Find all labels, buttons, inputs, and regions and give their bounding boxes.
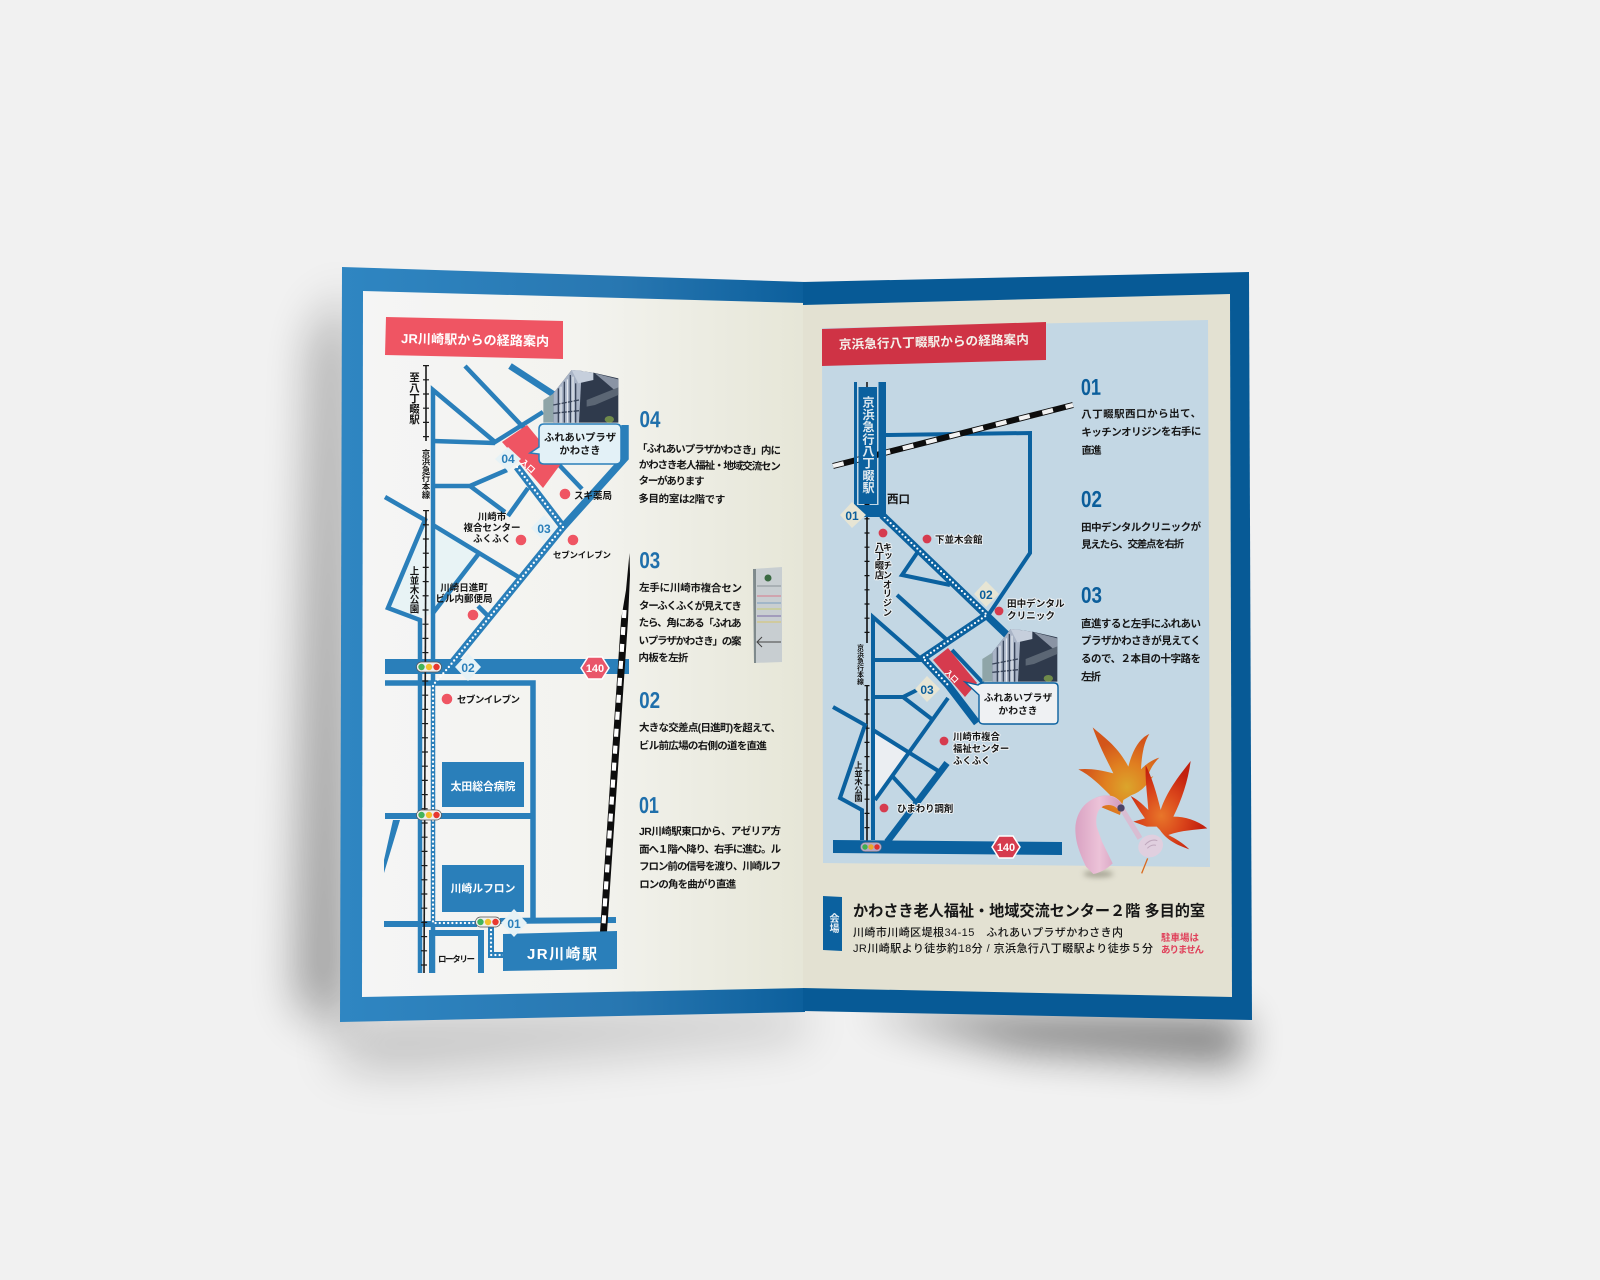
map labels: セブンイレブン	[457, 694, 520, 706]
step 01 text right: 直進	[1081, 444, 1102, 457]
venue label: 会場	[827, 912, 839, 934]
heading: JR route: JR川崎駅からの経路案内	[401, 331, 549, 349]
building: Lufron	[442, 865, 524, 912]
sign photo	[753, 567, 782, 663]
step markers: 01	[507, 917, 521, 931]
map labels: 西口	[887, 493, 910, 506]
buildings	[442, 762, 524, 807]
red venue building	[933, 648, 977, 697]
road fragment	[384, 820, 400, 873]
step 03 text: いプラザかわさき」の案	[639, 634, 742, 648]
parking note: ありません	[1161, 945, 1204, 956]
booklet shadow	[300, 290, 1245, 1070]
thick dotted roads	[882, 515, 1007, 723]
map panel	[822, 320, 1210, 867]
illustration: maple leaves and hearing aid	[1075, 727, 1207, 877]
left page paper	[362, 291, 805, 997]
step 03 text	[638, 547, 743, 665]
callout: Fureai Plaza: ふれあいプラザ	[984, 692, 1052, 704]
route dots	[433, 467, 563, 955]
map labels: 至八丁畷駅	[408, 372, 420, 425]
step 01 text right: 01	[1081, 374, 1101, 400]
station: Hatchonawate: 京浜急行八丁畷駅	[860, 395, 875, 494]
map: JR Kawasaki route	[384, 365, 630, 973]
thick diagonal roads	[448, 425, 625, 955]
map labels: キッチンオリジン	[882, 542, 892, 617]
step 01 text: JR川崎駅東口から、アゼリア方	[639, 825, 781, 838]
leaf: red	[1131, 761, 1207, 849]
map labels: 川崎市	[478, 511, 507, 523]
booklet: left page	[340, 267, 1252, 1022]
step markers: 03	[920, 683, 934, 697]
map labels: ひまわり調剤	[897, 803, 953, 814]
traffic signals	[416, 662, 500, 927]
heading: Keikyu route: 京浜急行八丁畷駅からの経路案内	[839, 332, 1029, 352]
step 02 text right: 見えたら、交差点を右折	[1081, 537, 1185, 551]
map labels: スギ薬局	[574, 490, 612, 502]
step 01 text: 01	[639, 792, 659, 818]
step 03 text right: 直進すると左手にふれあい	[1081, 617, 1201, 630]
map labels: 京浜急行本線	[856, 643, 864, 686]
building: red venue: 入口	[519, 458, 537, 475]
map labels: 上並木公園	[408, 565, 419, 614]
roads	[833, 433, 1030, 842]
step 03 text: 左手に川崎市複合セン	[639, 581, 742, 595]
hearing aid tube	[1097, 798, 1140, 838]
map labels: 下並木会館	[935, 534, 983, 546]
ear piece	[1135, 831, 1167, 861]
step 02 text right: 田中デンタルクリニックが	[1081, 520, 1202, 534]
map labels: ビル内郵便局	[435, 593, 493, 605]
building: red venue	[502, 425, 560, 488]
right page blue cover	[803, 272, 1252, 1020]
step 03 text: ターふくふくが見えてき	[639, 599, 742, 613]
leaf stem	[1142, 858, 1148, 873]
step 04 text	[636, 406, 782, 507]
station: Hatchonawate	[854, 382, 886, 517]
map labels	[854, 493, 1065, 814]
step 01 text right	[1081, 373, 1202, 457]
step markers: 02	[979, 588, 993, 602]
station: JR Kawasaki: JR川崎駅	[527, 945, 597, 963]
step 01 text: 面へ１階へ降り、右手に進む。ル	[639, 843, 782, 856]
step 04 text: 04	[639, 406, 661, 432]
step 03 text right: るので、２本目の十字路を	[1081, 652, 1201, 665]
step markers: 04	[501, 452, 515, 466]
map: Hatchonawate route	[833, 382, 1073, 858]
railway Keikyu line	[424, 365, 426, 973]
park area	[875, 733, 907, 800]
step 03 text right: 左折	[1081, 670, 1102, 683]
step 01 text right: 八丁畷駅西口から出て、	[1081, 407, 1201, 421]
parking note: 駐車場は	[1161, 932, 1200, 944]
heading: Keikyu route	[822, 322, 1046, 366]
map labels: 京浜急行本線	[421, 448, 431, 500]
step markers	[840, 502, 999, 702]
step 01 text: ロンの角を曲がり直進	[639, 878, 737, 891]
map labels: 複合センター	[463, 522, 521, 534]
map labels: 福祉センター	[953, 743, 1009, 754]
route 140 sign	[581, 657, 609, 679]
map labels: ふくふく	[473, 534, 511, 545]
signal	[860, 842, 882, 852]
road 140	[385, 659, 629, 674]
step markers	[455, 447, 557, 937]
map labels: 上並木公園	[854, 760, 863, 803]
callout: Fureai Plaza: かわさき	[998, 705, 1038, 717]
venue info: かわさき老人福祉・地域交流センター２階 多目的室	[853, 902, 1205, 920]
park area	[388, 522, 478, 620]
leaf: orange	[1078, 727, 1159, 815]
step 02 text	[639, 687, 781, 752]
roads	[384, 366, 616, 973]
step markers: 01	[845, 509, 859, 523]
photo: venue building	[543, 370, 618, 423]
map labels: セブンイレブン	[553, 550, 611, 560]
shadow	[1083, 871, 1113, 877]
map labels: 川崎日進町	[440, 582, 488, 594]
map labels: 川崎市複合	[953, 731, 1001, 742]
route 140 sign	[992, 836, 1020, 858]
step 03 text: 03	[639, 547, 660, 573]
step 04 text: ターがあります	[638, 474, 705, 488]
right page paper	[803, 294, 1232, 997]
map labels: ロータリー	[438, 954, 475, 964]
step 01 text: フロン前の信号を渡り、川崎ルフ	[639, 860, 781, 873]
rail Keikyu vertical	[866, 504, 868, 842]
step 03 text right: 03	[1081, 582, 1102, 608]
map labels	[408, 372, 612, 964]
step 04 text: かわさき老人福祉・地域交流セン	[639, 458, 781, 473]
venue info	[853, 902, 1205, 955]
map labels: クリニック	[1007, 611, 1055, 622]
tube joint	[1117, 804, 1125, 812]
photo: venue building	[982, 629, 1057, 682]
step 02 text right	[1081, 485, 1202, 551]
venue info: JR川崎駅より徒歩約18分 / 京浜急行八丁畷駅より徒歩５分	[853, 941, 1153, 955]
route 140 sign: 140	[586, 663, 604, 675]
step markers: 02	[461, 661, 475, 675]
callout: Fureai Plaza	[530, 424, 621, 464]
step 03 text right: プラザかわさきが見えてく	[1081, 634, 1201, 647]
parking note	[1161, 932, 1204, 956]
red venue building: 入口	[943, 668, 960, 685]
rail JR diagonal	[833, 405, 1073, 466]
step 04 text: 「ふれあいプラザかわさき」内に	[637, 442, 781, 457]
map labels: 八丁畷店	[874, 542, 884, 580]
callout: Fureai Plaza: かわさき	[559, 445, 601, 457]
station: JR Kawasaki	[503, 931, 617, 971]
venue info: 川崎市川崎区堤根34-15 ふれあいプラザかわさき内	[853, 925, 1123, 939]
step 02 text: ビル前広場の右側の道を直進	[639, 739, 767, 752]
callout: Fureai Plaza: ふれあいプラザ	[544, 432, 617, 444]
left page blue cover	[340, 267, 805, 1022]
step 02 text right: 02	[1081, 486, 1102, 512]
railway JR	[600, 553, 630, 932]
buildings: 太田総合病院	[451, 779, 516, 793]
step 03 text right	[1081, 582, 1201, 683]
road 140	[833, 840, 1062, 855]
heading: JR route	[385, 317, 563, 359]
map labels: ふくふく	[953, 755, 991, 766]
step 01 text right: キッチンオリジンを右手に	[1081, 425, 1201, 439]
step 03 text: たら、角にある「ふれあ	[639, 616, 742, 630]
step 03 text: 内板を左折	[638, 651, 689, 664]
building: Lufron: 川崎ルフロン	[451, 881, 516, 895]
route 140 sign: 140	[997, 842, 1015, 854]
venue label	[823, 896, 842, 951]
step 04 text: 多目的室は2階です	[638, 492, 725, 506]
map labels: 田中デンタル	[1007, 598, 1065, 610]
hearing aid body	[1075, 796, 1123, 874]
step 01 text	[639, 792, 782, 891]
callout: Fureai Plaza	[965, 682, 1058, 724]
booklet: right page	[803, 272, 1252, 1020]
step 02 text: 02	[639, 687, 660, 713]
step 02 text: 大きな交差点(日進町)を超えて、	[639, 721, 781, 734]
step markers: 03	[537, 522, 551, 536]
